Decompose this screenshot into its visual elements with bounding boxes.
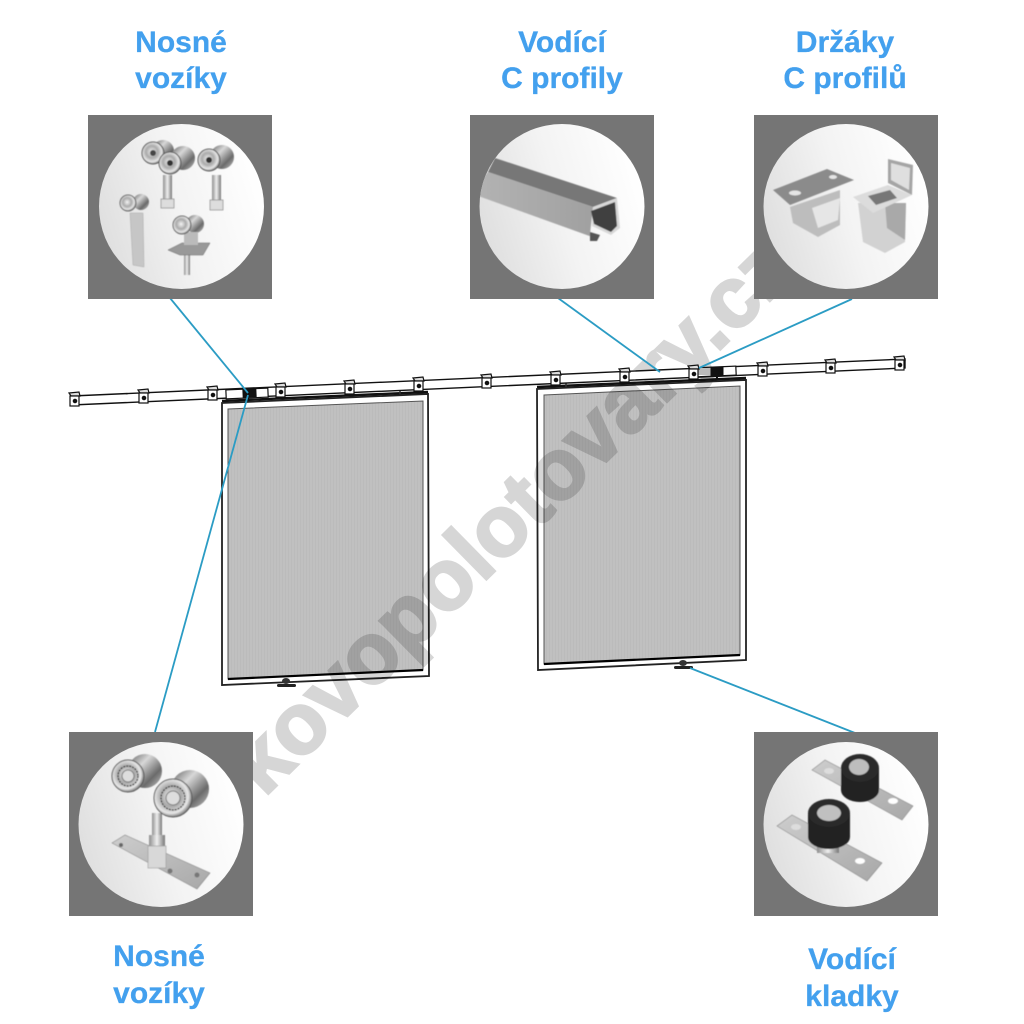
- connector lines: [155, 298, 855, 733]
- heading: Vodící kladky: Vodící: [808, 943, 898, 976]
- icon: two brackets: [773, 159, 913, 253]
- brackets: [69, 356, 905, 406]
- watermark: kovopolotovary.cz: [210, 218, 811, 812]
- panel: C profile: [470, 115, 654, 299]
- icon: twin wheel trolley: [112, 754, 210, 889]
- heading: Nosné vozíky top: Nosné: [135, 26, 227, 59]
- door 1: [222, 390, 429, 687]
- icon: two guide rollers: [777, 754, 913, 881]
- sliding rail with brackets: [69, 356, 905, 406]
- panel: C profile brackets: [754, 115, 938, 299]
- door 2: [537, 375, 746, 670]
- panel: carrier trolley bottom: [69, 732, 253, 916]
- heading: Vodící kladky: kladky: [805, 980, 899, 1013]
- icon: C profile rail: [470, 158, 620, 241]
- panel: guide rollers: [754, 732, 938, 916]
- icon: four trolley variants: [120, 140, 234, 275]
- heading: Nosné vozíky top: vozíky: [135, 62, 227, 95]
- heading: Vodící C profily: C profily: [501, 62, 623, 95]
- trolley in rail, left: [226, 388, 268, 399]
- heading: Nosné vozíky bottom: vozíky: [113, 977, 205, 1010]
- heading: Držáky C profilů: Držáky: [796, 26, 895, 59]
- heading: Nosné vozíky bottom: Nosné: [113, 940, 205, 973]
- heading: Vodící C profily: Vodící: [518, 26, 608, 59]
- trolley in rail, right: [695, 366, 736, 377]
- panel: carrier trolleys top: [88, 115, 272, 299]
- heading: Držáky C profilů: C profilů: [783, 62, 907, 95]
